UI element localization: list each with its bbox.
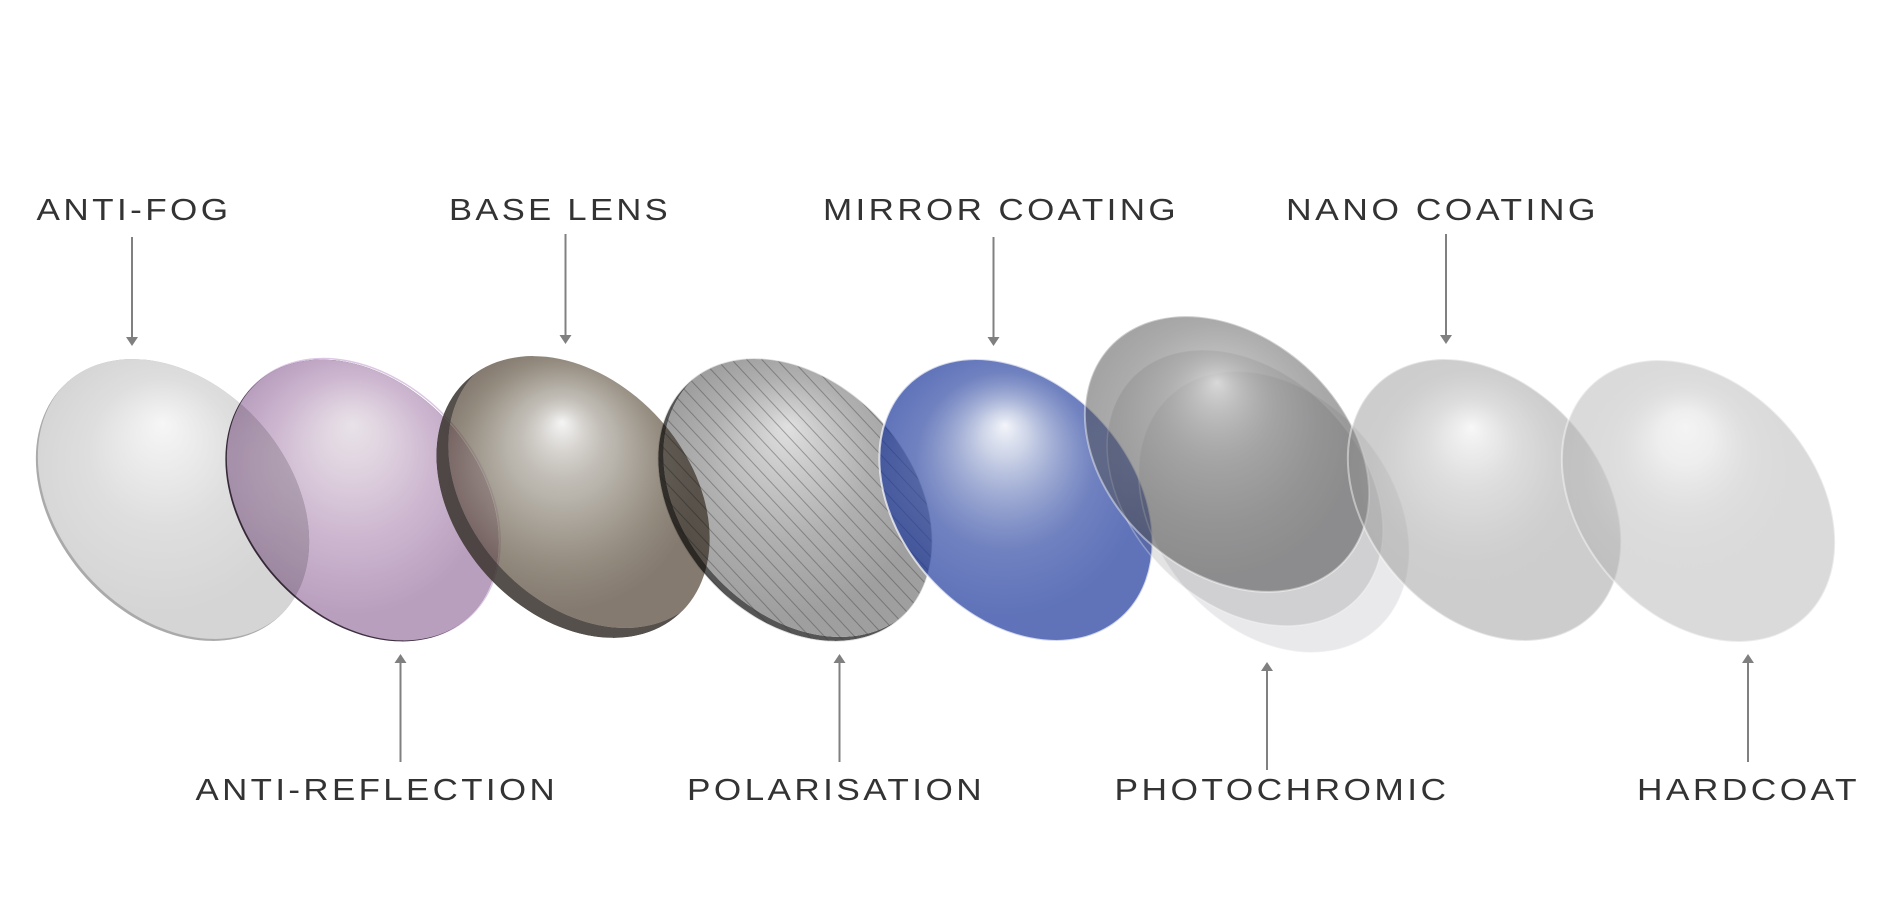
arrow: anti-fog bbox=[126, 237, 138, 346]
lens: photochromic bbox=[1030, 260, 1465, 706]
lens: base lens bbox=[436, 356, 710, 638]
label: nano coating: NANO COATING bbox=[1286, 192, 1599, 227]
label: photochromic: PHOTOCHROMIC bbox=[1114, 772, 1450, 807]
photochromic layer: darkest bbox=[1030, 260, 1424, 648]
label: polarisation: POLARISATION bbox=[687, 772, 985, 807]
lens: mirror coating bbox=[824, 305, 1208, 695]
arrow: base lens bbox=[560, 234, 572, 344]
label: hardcoat: HARDCOAT bbox=[1637, 772, 1860, 807]
arrow: anti-reflection bbox=[394, 654, 406, 762]
label: anti-fog: ANTI-FOG bbox=[36, 192, 232, 227]
label: mirror coating: MIRROR COATING bbox=[823, 192, 1179, 227]
lens: hardcoat bbox=[1506, 306, 1891, 696]
arrow: photochromic bbox=[1261, 662, 1273, 770]
arrow: polarisation bbox=[834, 654, 846, 762]
arrow: mirror coating bbox=[988, 237, 1000, 346]
lens: anti-reflection bbox=[225, 358, 501, 642]
label: anti-reflection: ANTI-REFLECTION bbox=[196, 772, 558, 807]
arrow: nano coating bbox=[1440, 234, 1452, 344]
lens: polarisation bbox=[658, 358, 932, 642]
label: base lens: BASE LENS bbox=[449, 192, 671, 227]
photochromic layer: lightest bbox=[1083, 318, 1465, 706]
arrow: hardcoat bbox=[1742, 654, 1754, 762]
photochromic layer: medium bbox=[1052, 295, 1438, 681]
lens: anti-fog bbox=[36, 359, 310, 641]
lens: nano coating bbox=[1292, 305, 1677, 695]
lens stack bbox=[36, 316, 1835, 652]
